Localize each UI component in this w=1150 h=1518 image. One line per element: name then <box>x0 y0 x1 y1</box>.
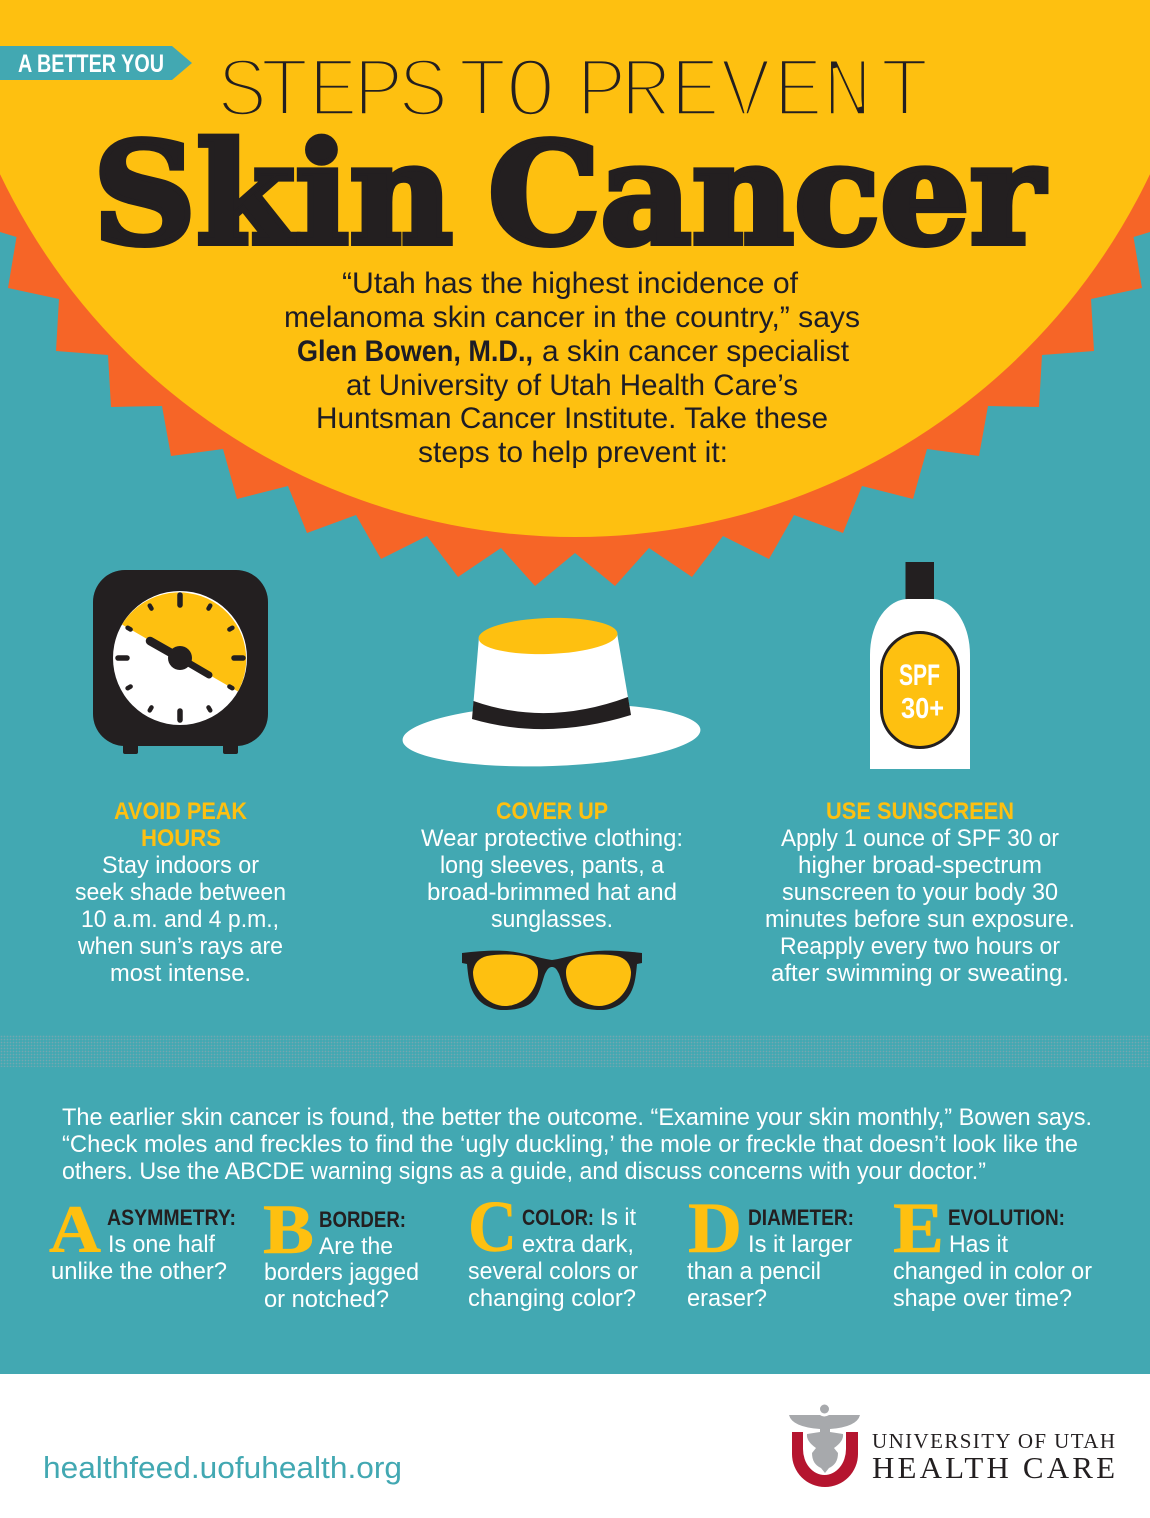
abcde: color: changing color? <box>468 1285 636 1312</box>
heading <box>114 798 248 852</box>
icon: sunglasses <box>462 951 642 1010</box>
column: use sunscreen <box>765 798 1075 987</box>
paragraph: early detection: others. Use the ABCDE warning signs as a guide, and discuss concerns with your doctor.” <box>62 1158 986 1185</box>
title <box>93 44 1046 277</box>
heading: AVOID PEAK <box>114 798 248 825</box>
body text: seek shade between <box>75 879 286 906</box>
body text <box>765 825 1075 987</box>
abcde: color: several colors or <box>468 1258 638 1285</box>
abcde: diameter: Is it larger <box>748 1231 852 1258</box>
abcde: asymmetry <box>49 1191 236 1285</box>
title line: skin cancer: Cancer <box>488 113 1046 277</box>
abcde: color: COLOR: <box>522 1205 594 1230</box>
big letter e: E <box>893 1188 944 1268</box>
abcde: evolution: shape over time? <box>893 1285 1072 1312</box>
intro quote: Huntsman Cancer Institute. Take these <box>316 402 828 435</box>
footer <box>0 1374 1150 1518</box>
abcde: border <box>263 1191 419 1313</box>
right lens <box>566 954 631 1006</box>
paragraph: early detection <box>62 1104 1092 1185</box>
body text: long sleeves, pants, a <box>440 852 665 879</box>
body text: sunscreen to your body 30 <box>782 879 1058 906</box>
abcde: border: or notched? <box>264 1286 389 1313</box>
body text: after swimming or sweating. <box>771 960 1069 987</box>
abcde: color <box>468 1186 638 1312</box>
sun header <box>0 0 1150 586</box>
abcde: diameter: DIAMETER: <box>748 1205 854 1230</box>
intro quote: at University of Utah Health Care’s <box>346 369 798 402</box>
body text: Reapply every two hours or <box>780 933 1060 960</box>
left lens <box>473 954 538 1006</box>
body text: most intense. <box>110 960 251 987</box>
intro quote: steps to help prevent it: <box>418 436 728 469</box>
abcde: diameter: eraser? <box>687 1285 767 1312</box>
abcde: border: BORDER: <box>319 1207 406 1232</box>
heading: HOURS <box>141 825 221 852</box>
intro quote <box>284 267 860 469</box>
abcde: border: borders jagged <box>264 1259 419 1286</box>
paragraph: early detection: “Check moles and freckles to find the ‘ugly duckling,’ the mole or freckle that doesn’t look like the <box>62 1131 1078 1158</box>
logo text: UNIVERSITY OF UTAH <box>872 1429 1115 1453</box>
title line: steps to prevent: STEPS TO PREVENT <box>217 44 930 142</box>
big letter c: C <box>468 1186 517 1267</box>
badge: a better you: A BETTER YOU <box>18 50 164 78</box>
big letter d: D <box>688 1188 742 1268</box>
abcde: diameter: than a pencil <box>687 1258 821 1285</box>
abcde: evolution: Has it <box>949 1231 1008 1258</box>
abcde: asymmetry: unlike the other? <box>51 1258 227 1285</box>
big letter b: B <box>263 1191 314 1269</box>
website url: healthfeed.uofuhealth.org <box>43 1450 402 1485</box>
column: avoid peak hours <box>75 798 286 987</box>
abcde: asymmetry: Is one half <box>108 1231 215 1258</box>
big letter a: A <box>49 1191 101 1267</box>
icon: sunscreen bottle <box>870 562 970 769</box>
body text: broad-brimmed hat and <box>427 879 677 906</box>
abcde: color: Is it <box>600 1204 636 1231</box>
title line: skin cancer <box>93 113 1046 277</box>
logo: university of utah health care <box>789 1404 1115 1487</box>
body text: minutes before sun exposure. <box>765 906 1075 933</box>
logo mark <box>789 1404 860 1487</box>
sun rays <box>0 0 1150 586</box>
heading: USE SUNSCREEN <box>826 798 1014 825</box>
intro quote: a skin cancer specialist <box>542 335 850 368</box>
abcde: color: extra dark, <box>522 1231 634 1258</box>
paragraph: early detection: The earlier skin cancer is found, the better the outcome. “Examine your skin monthly,” Bowen says. <box>62 1104 1092 1131</box>
abcde: asymmetry: ASYMMETRY: <box>107 1205 236 1230</box>
body text: Apply 1 ounce of SPF 30 or <box>781 825 1059 852</box>
logo: university of utah health care: HEALTH CARE <box>872 1450 1115 1485</box>
column: cover up <box>421 798 683 933</box>
abcde: evolution: EVOLUTION: <box>948 1205 1065 1230</box>
abcde: evolution <box>893 1188 1092 1312</box>
intro quote: melanoma skin cancer in the country,” says <box>284 301 860 334</box>
sunglasses frame <box>462 951 642 1010</box>
heading: COVER UP <box>496 798 608 825</box>
sun disc <box>0 0 1150 537</box>
body text: Stay indoors or <box>102 852 259 879</box>
body text: Wear protective clothing: <box>421 825 683 852</box>
body text: sunglasses. <box>491 906 613 933</box>
body text <box>421 825 683 933</box>
intro quote: “Utah has the highest incidence of <box>342 267 799 300</box>
body text <box>75 852 286 987</box>
body text: higher broad-spectrum <box>798 852 1042 879</box>
icon: sunscreen bottle: SPF <box>899 659 940 692</box>
icon: clock <box>93 570 268 754</box>
body text: when sun’s rays are <box>77 933 283 960</box>
intro quote: Glen Bowen, M.D., <box>297 335 533 368</box>
icon: hat <box>402 616 701 771</box>
title line: skin cancer: Skin <box>93 113 453 277</box>
abcde: evolution: changed in color or <box>893 1258 1092 1285</box>
abcde: border: Are the <box>319 1233 393 1260</box>
icon: sunscreen bottle: 30+ <box>901 693 944 725</box>
body text: 10 a.m. and 4 p.m., <box>81 906 279 933</box>
abcde: diameter <box>687 1188 854 1312</box>
